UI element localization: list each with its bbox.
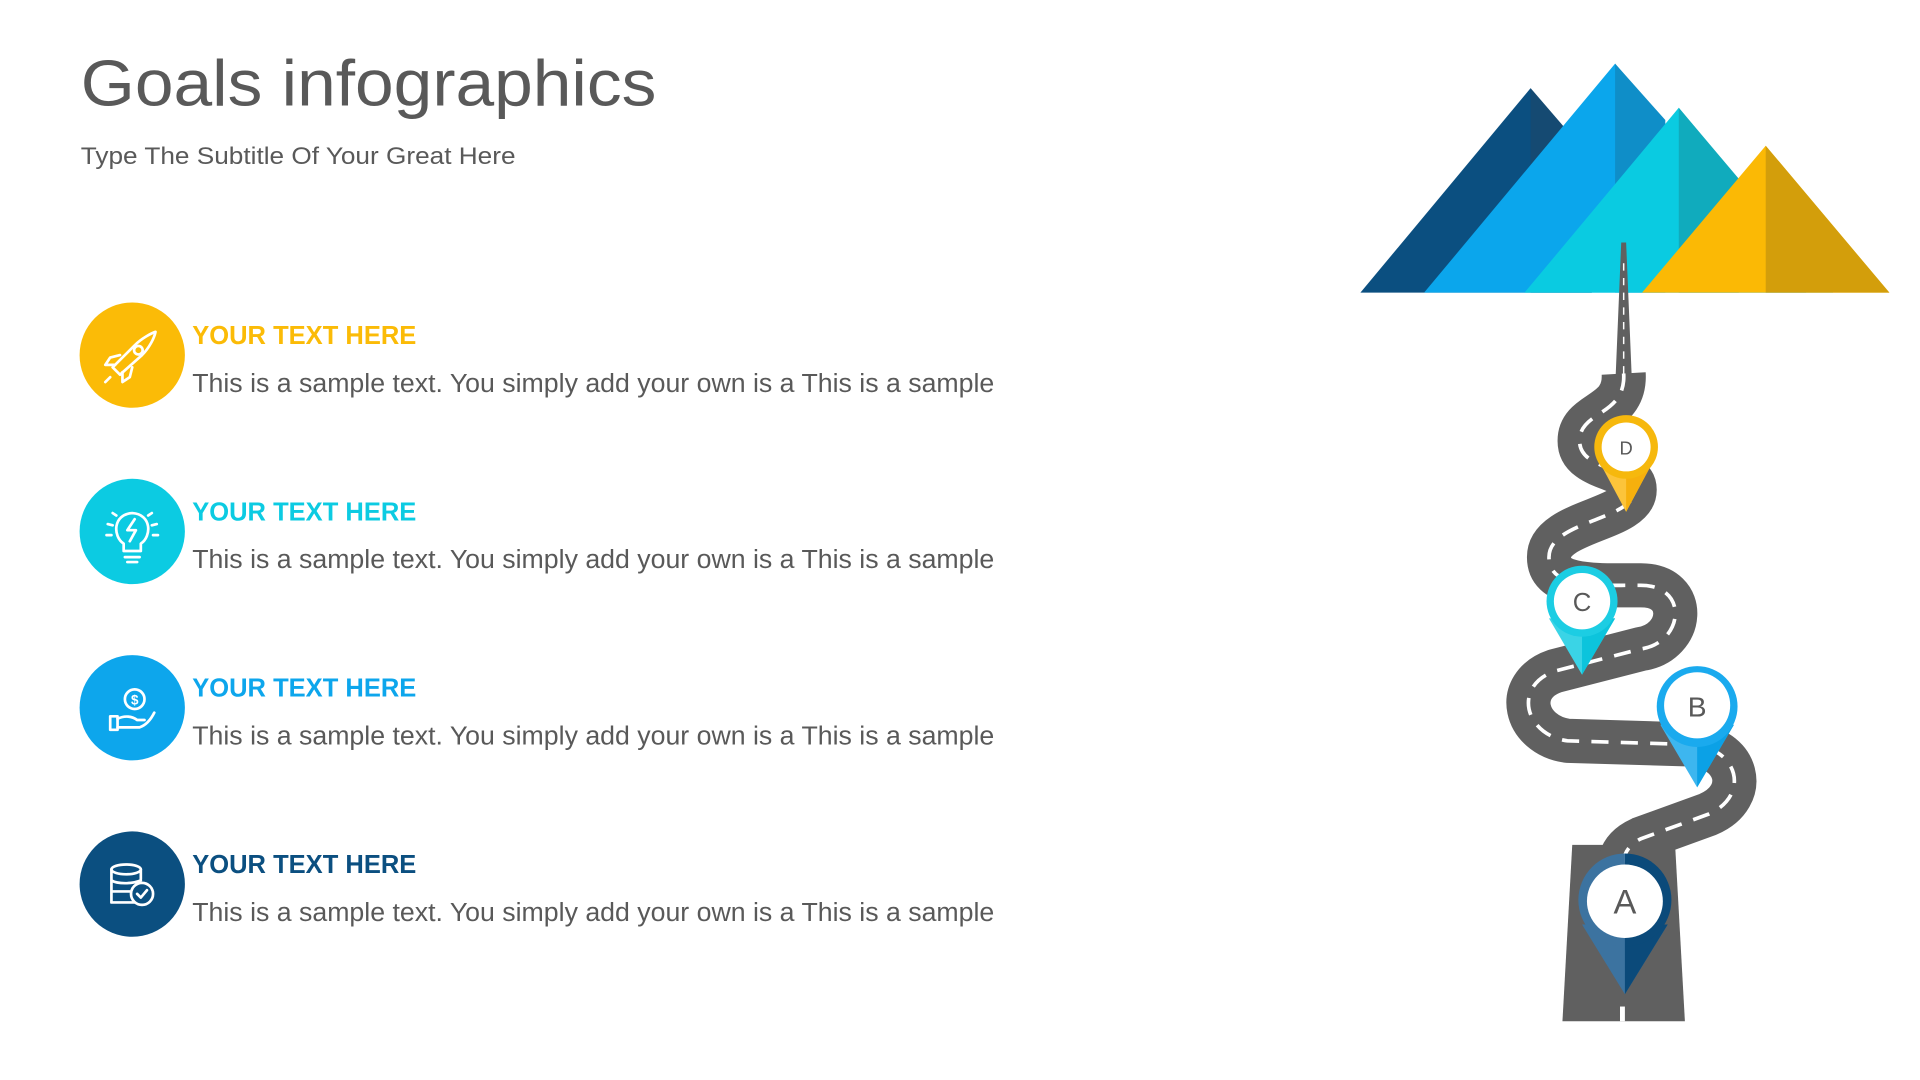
road (1528, 242, 1734, 1021)
heading: YOUR TEXT HERE (192, 498, 416, 526)
pin D (1594, 415, 1658, 512)
item 3 (80, 655, 994, 760)
pin B: B (1688, 691, 1707, 722)
subtitle: Type The Subtitle Of Your Great Here (81, 143, 516, 170)
heading: YOUR TEXT HERE (192, 851, 416, 879)
item 2 (80, 479, 994, 584)
pin C: C (1573, 589, 1591, 617)
heading: YOUR TEXT HERE (192, 675, 416, 703)
icon: rocket (80, 302, 185, 408)
body text: This is a sample text. You simply add your own is a This is a sample (192, 899, 994, 927)
pin A (1578, 853, 1671, 994)
pin D: D (1619, 437, 1633, 458)
body text: This is a sample text. You simply add your own is a This is a sample (192, 722, 994, 750)
item 4 (80, 831, 994, 937)
icon: hand with coin (80, 655, 185, 760)
pin A: A (1613, 883, 1636, 921)
icon: database check (80, 831, 185, 937)
pin C (1547, 566, 1618, 675)
body text: This is a sample text. You simply add your own is a This is a sample (192, 370, 994, 398)
heading: YOUR TEXT HERE (192, 322, 416, 350)
body text: This is a sample text. You simply add your own is a This is a sample (192, 546, 994, 574)
mountains (1360, 64, 1889, 293)
icon: light bulb (80, 479, 185, 584)
pin B (1657, 666, 1738, 787)
item 1 (80, 302, 994, 408)
title: Goals infographics (81, 46, 656, 119)
icon: hand with coin: $ (131, 693, 139, 708)
